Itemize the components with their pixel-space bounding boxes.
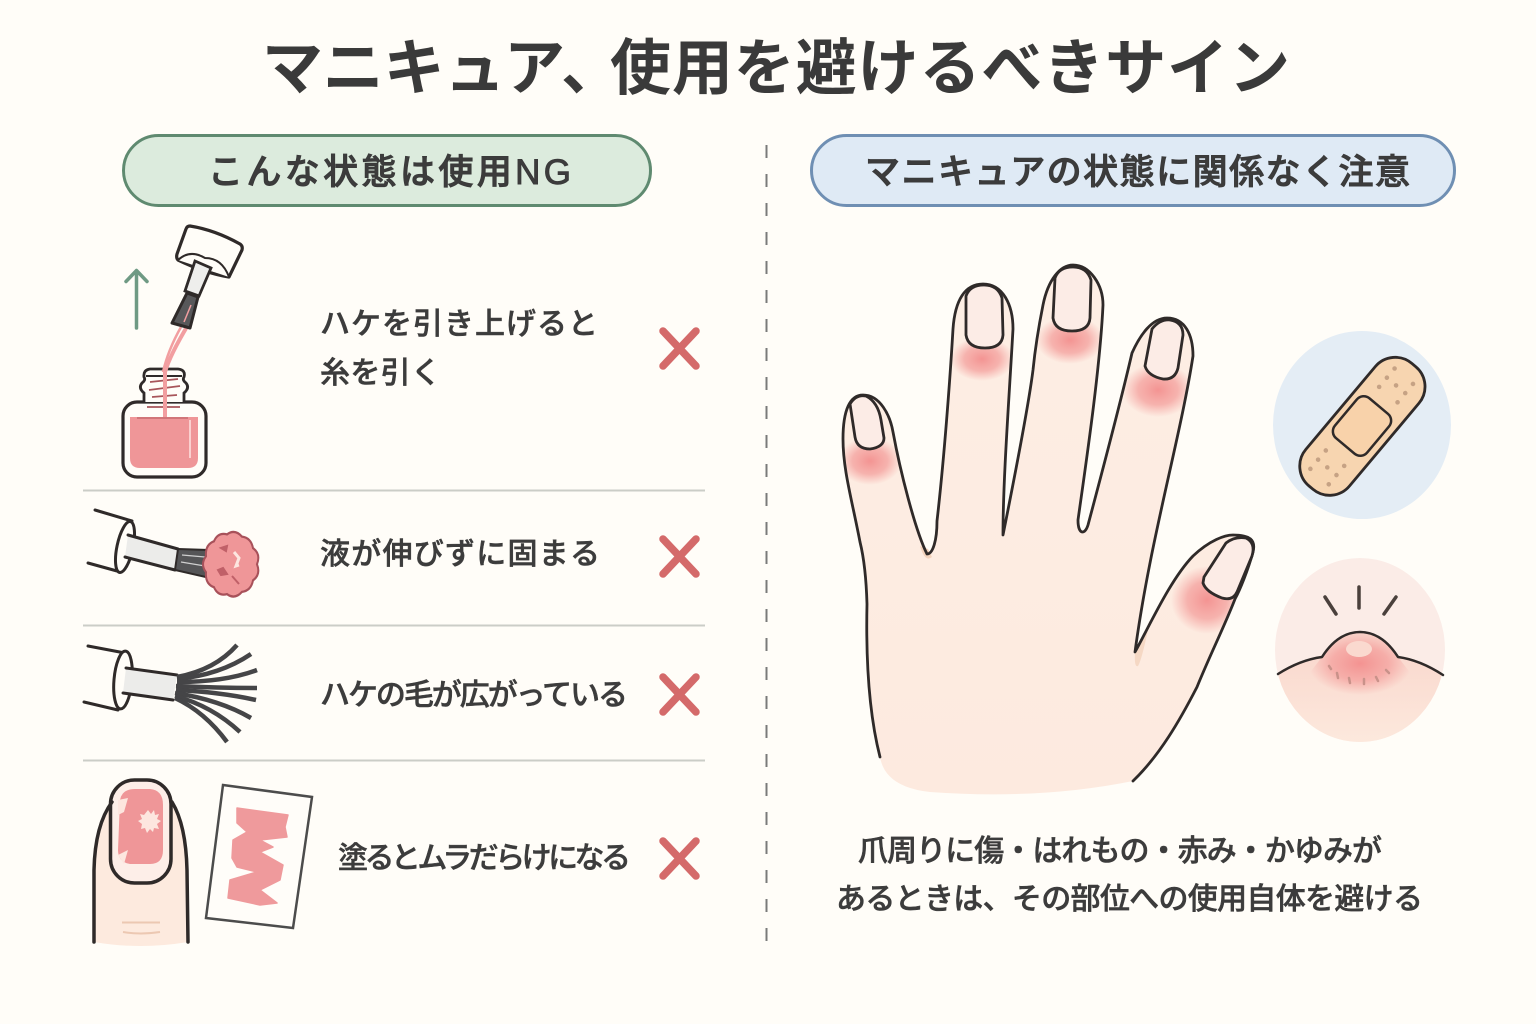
text: caution note: 爪周りに傷・はれもの・赤み・かゆみが xyxy=(858,835,1382,868)
text: strings when lifting: 糸を引く xyxy=(320,357,441,390)
title: マニキュア xyxy=(262,34,565,102)
text: strings when lifting: ハケを引き上げると xyxy=(320,308,598,341)
icon: splayed brush xyxy=(84,645,257,742)
title: 、 xyxy=(561,34,622,102)
icon: finger with uneven polish xyxy=(94,780,188,946)
panel heading: caution regardless of polish condition: マニキュアの状態に関係なく注意 xyxy=(865,153,1410,192)
icon: swollen nail fold in pink circle xyxy=(1270,558,1450,750)
text: strings when lifting xyxy=(320,308,598,390)
icon: brush with clumped polish xyxy=(88,510,258,597)
illustration: hand with reddened nail folds xyxy=(838,265,1254,794)
icon: bandage in blue circle xyxy=(1273,331,1451,519)
icon: up arrow xyxy=(126,270,147,328)
icon: red X row 4 xyxy=(663,841,696,876)
text: caution note xyxy=(836,835,1423,916)
panel heading: NG conditions xyxy=(124,136,650,206)
text: polish does not spread: 液が伸びずに固まる xyxy=(320,538,600,571)
icon: red X row 1 xyxy=(663,331,696,366)
icon: red X row 3 xyxy=(663,677,696,712)
title: 使用を避けるべきサイン xyxy=(610,34,1290,102)
text: streaky when applied: 塗るとムラだらけになる xyxy=(338,842,631,875)
icon: polish bottle with stringy brush xyxy=(123,226,242,477)
center dashed divider xyxy=(766,145,768,952)
text: caution note: あるときは、その部位への使用自体を避ける xyxy=(836,883,1423,916)
panel heading: NG conditions: こんな状態は使用NG xyxy=(208,153,571,192)
panel heading: caution regardless of polish condition xyxy=(812,136,1454,206)
icon: red X row 2 xyxy=(663,539,696,574)
text: bristles spread: ハケの毛が広がっている xyxy=(320,679,628,712)
title xyxy=(262,34,1290,102)
icon: test paper with streaky polish xyxy=(206,785,312,928)
